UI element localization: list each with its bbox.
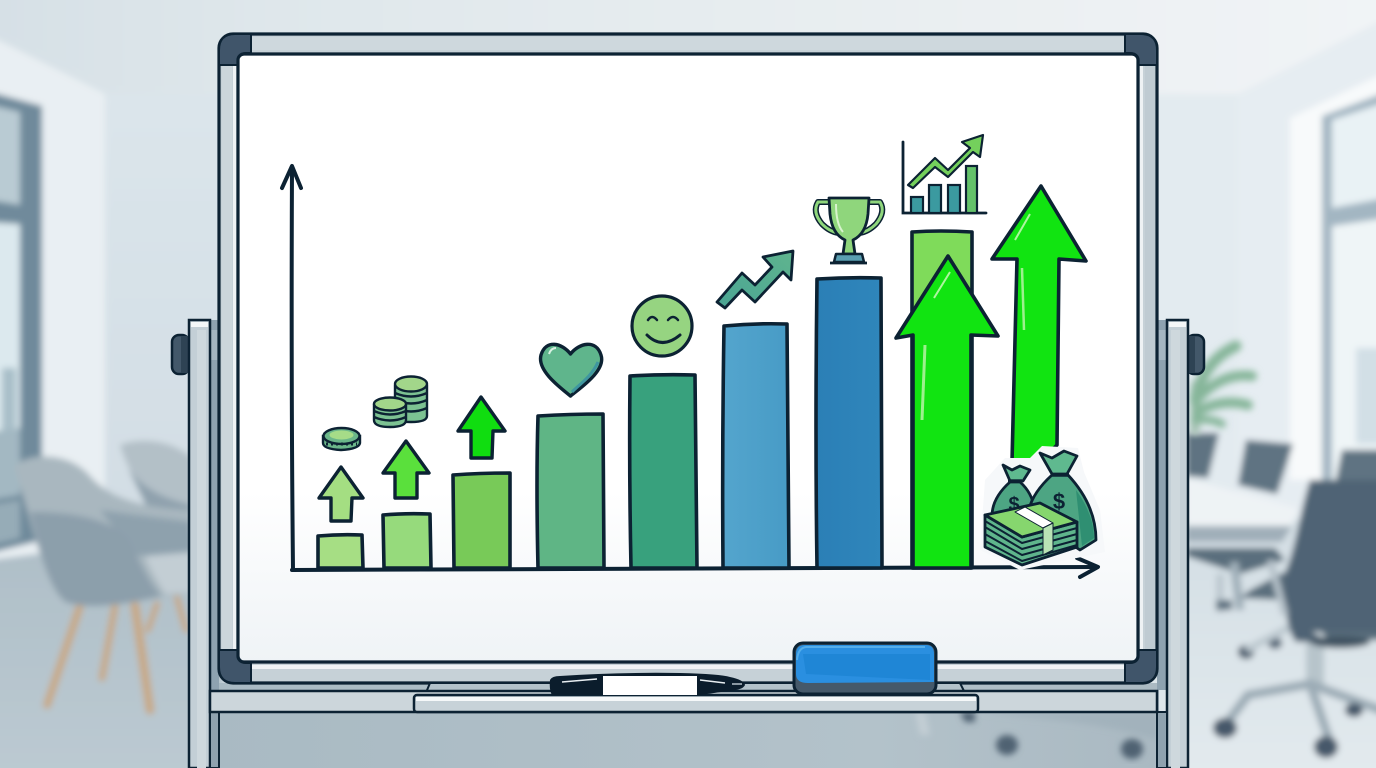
left side wall xyxy=(0,36,105,560)
bar 7 xyxy=(816,278,882,568)
right stand post xyxy=(1157,320,1204,768)
icon: heart xyxy=(541,344,602,396)
cash stack xyxy=(985,503,1077,565)
bar 4 xyxy=(537,414,604,568)
big green arrow over bar 8 xyxy=(896,256,998,568)
table chair and legs xyxy=(1186,548,1285,574)
icon: smiley face xyxy=(632,296,692,356)
shelf and marker tray xyxy=(210,683,1157,712)
arrow: small up arrow 2 xyxy=(383,441,429,498)
icon: left knob xyxy=(172,335,189,374)
inner stand uprights xyxy=(210,712,1167,768)
frame corner bottom right xyxy=(1125,650,1157,683)
back chair xyxy=(120,441,192,512)
left back wall xyxy=(105,94,225,534)
right back wall xyxy=(1155,94,1239,534)
stand panel under the shelf xyxy=(209,683,1159,768)
whiteboard frame xyxy=(219,34,1157,683)
icon: trophy xyxy=(816,198,882,263)
icon: coin stacks xyxy=(374,376,427,427)
right floor xyxy=(1150,520,1376,768)
small money bag: $ xyxy=(1008,494,1020,516)
left stand post xyxy=(172,320,219,768)
right window xyxy=(1290,72,1376,480)
right side wall xyxy=(1238,18,1376,520)
icon: money bags and cash stack xyxy=(980,446,1105,570)
big green arrow right xyxy=(992,186,1086,462)
white sticker halo xyxy=(980,446,1105,570)
frame corner bottom left xyxy=(219,650,251,683)
large money bag: $ xyxy=(1053,489,1065,514)
icon: zigzag growth arrow xyxy=(717,251,793,308)
bar 6 xyxy=(723,324,789,568)
ceiling xyxy=(0,0,1376,94)
bar 1 xyxy=(318,535,363,568)
left floor xyxy=(0,530,225,768)
eraser xyxy=(794,643,936,694)
icon: single coin xyxy=(323,428,360,450)
table xyxy=(1186,478,1298,530)
bar chart axes xyxy=(282,166,1098,577)
frame corner top right xyxy=(1125,34,1157,65)
whiteboard surface xyxy=(238,54,1138,662)
front chair legs xyxy=(47,598,186,710)
icon: mini bar chart with arrow xyxy=(903,135,986,213)
icon: right knob xyxy=(1187,335,1204,374)
bar 5 xyxy=(630,375,697,568)
arrow: small up arrow 1 xyxy=(319,467,363,521)
bar 8 xyxy=(912,231,972,568)
bar 3 xyxy=(453,473,510,568)
front chair shell xyxy=(14,457,192,606)
arrow: small up arrow 3 xyxy=(458,397,505,458)
far chairs xyxy=(1186,433,1219,478)
left window xyxy=(0,92,42,553)
marker pen xyxy=(550,673,745,695)
plant xyxy=(1195,346,1252,430)
big office chair xyxy=(1240,572,1376,640)
frame corner top left xyxy=(219,34,251,65)
bar 2 xyxy=(383,514,431,568)
